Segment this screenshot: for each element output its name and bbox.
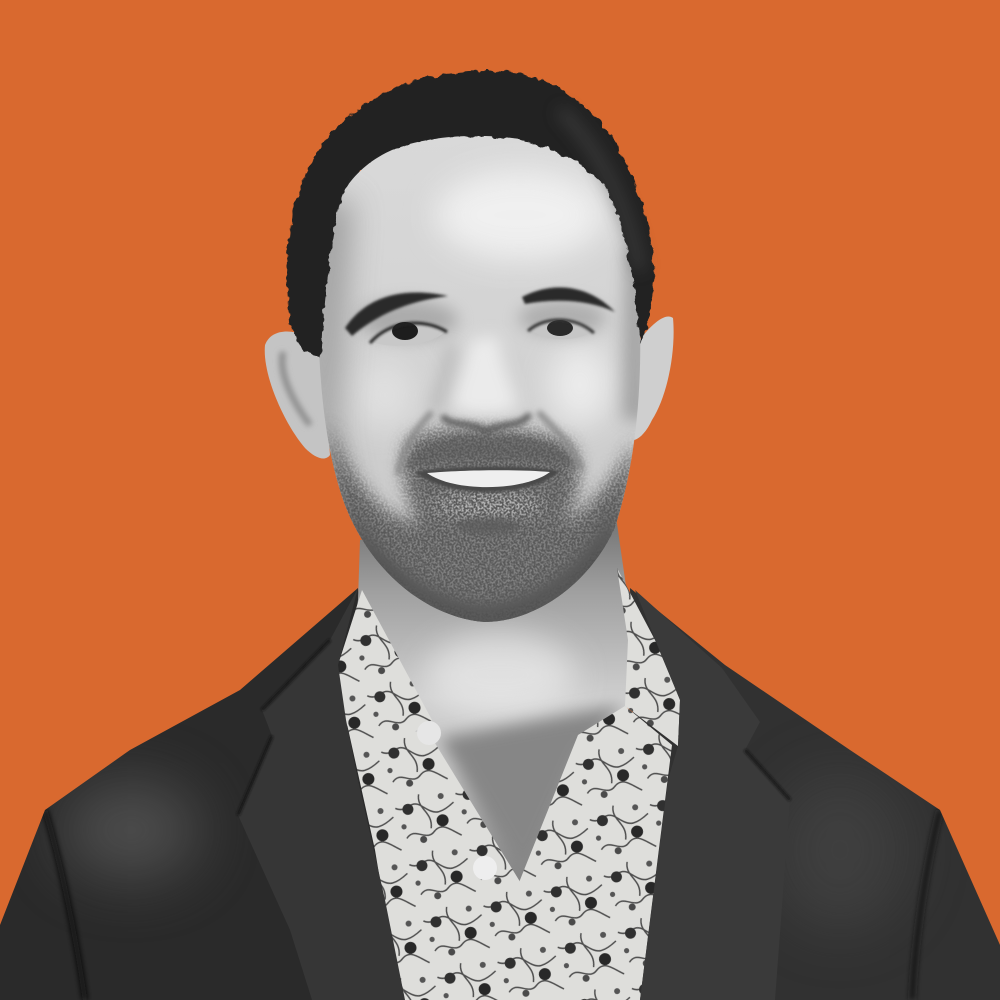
face <box>310 136 648 640</box>
right collar <box>617 568 680 746</box>
teeth <box>427 470 550 487</box>
left ear <box>265 331 330 459</box>
temple shadows <box>310 200 352 520</box>
chest shadow <box>440 705 622 885</box>
lapel edges <box>238 640 790 815</box>
beard tone <box>328 420 636 640</box>
right lapel <box>635 590 790 1000</box>
cheek highlights <box>548 343 612 427</box>
neck and chest <box>345 510 632 885</box>
mustache <box>403 436 580 470</box>
left shirt panel <box>345 715 522 1000</box>
neck highlight <box>425 633 575 717</box>
left eye <box>372 324 445 346</box>
shirt base <box>497 880 540 1000</box>
jacket body <box>0 588 1000 1000</box>
eye socket shadows <box>358 300 458 340</box>
smile folds <box>398 412 582 475</box>
hair sheen <box>560 110 640 270</box>
left eyebrow <box>345 293 448 336</box>
nose <box>452 335 518 415</box>
shirt with floral print <box>338 568 680 1000</box>
soul patch <box>456 518 520 534</box>
mouth <box>415 467 560 492</box>
beard stubble texture <box>328 420 636 640</box>
right shirt panel <box>497 706 672 1000</box>
left collar <box>338 590 432 738</box>
forehead highlight <box>435 170 605 260</box>
right ear <box>630 317 674 440</box>
hair <box>287 71 654 358</box>
right eye <box>530 320 592 339</box>
left lapel <box>238 588 405 1000</box>
shirt buttons <box>417 721 441 745</box>
right eyebrow <box>522 287 615 312</box>
lower lip highlight <box>430 491 546 519</box>
hair underlay <box>296 100 645 340</box>
